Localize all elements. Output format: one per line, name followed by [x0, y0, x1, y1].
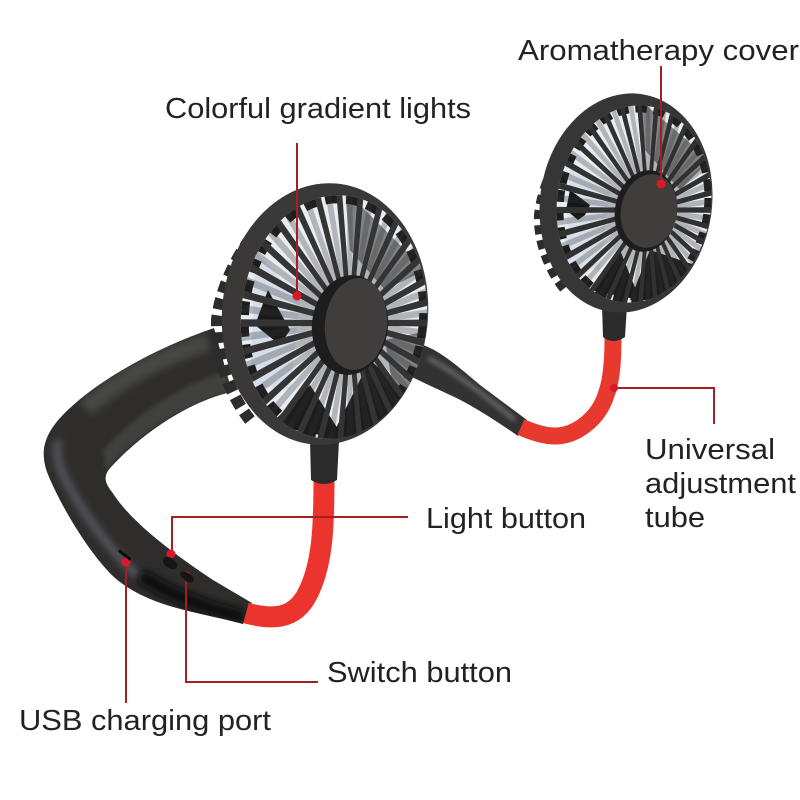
left flexible tube — [246, 480, 324, 617]
callout: USB charging port: USB charging port — [19, 705, 271, 737]
callout: USB charging port — [19, 558, 271, 737]
window with blades — [556, 105, 712, 303]
right fan neck — [602, 305, 627, 341]
callout: aromatherapy cover: Aromatherapy cover — [518, 35, 799, 67]
hub base — [307, 271, 393, 379]
back cage bumps — [217, 225, 262, 420]
right arm band — [410, 340, 527, 436]
callout: light button: Light button — [426, 503, 586, 535]
left fan neck — [310, 440, 339, 484]
right flexible tube — [521, 338, 613, 436]
spokes — [556, 106, 712, 302]
callout: universal adjustment tube: Universal — [645, 434, 775, 466]
outer ring — [526, 82, 726, 324]
callout: colorful gradient lights: Colorful gradient lights — [165, 93, 471, 125]
callout: universal adjustment tube: tube — [645, 502, 705, 534]
spokes — [240, 195, 428, 438]
neck band — [44, 328, 252, 624]
hub disc — [320, 275, 392, 373]
callout: switch button — [182, 572, 512, 689]
icon: band buttons and port — [118, 549, 196, 585]
callout: universal adjustment tube — [610, 384, 796, 534]
callout: universal adjustment tube: adjustment — [645, 468, 796, 500]
right fan — [534, 93, 713, 312]
callout: light button — [166, 503, 586, 558]
outer ring — [211, 175, 439, 453]
back cage spokes — [557, 106, 706, 302]
hub base — [608, 165, 684, 257]
window with blades — [240, 195, 428, 439]
back cage bumps — [539, 130, 578, 292]
back cage spokes — [242, 202, 428, 426]
left fan — [210, 183, 428, 444]
callout: colorful gradient lights — [165, 93, 471, 300]
hub disc — [615, 170, 683, 252]
callout: switch button: Switch button — [327, 657, 512, 689]
callout: aromatherapy cover — [518, 35, 799, 188]
